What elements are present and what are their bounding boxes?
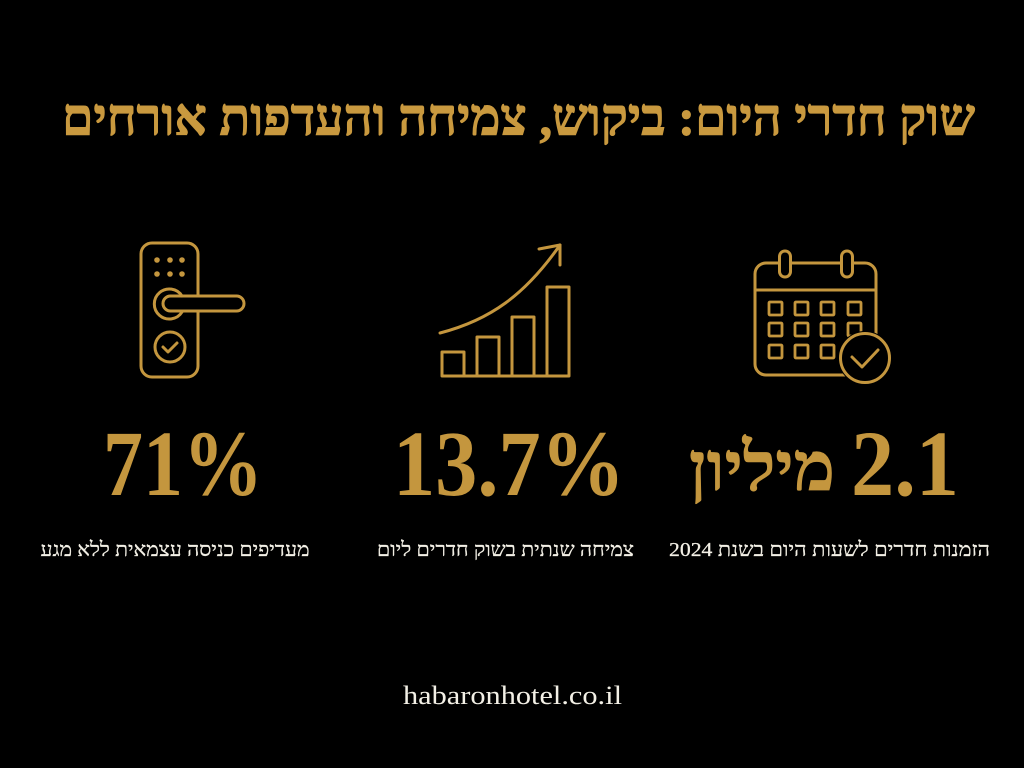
caption: annual growth: צמיחה שנתית בשוק חדרים ליום xyxy=(377,539,634,561)
caption: touchless entry: מעדיפים כניסה עצמאית ללא מגע xyxy=(40,539,310,561)
number: 13.7%: 13.7% xyxy=(393,413,625,516)
caption: bookings: הזמנות חדרים לשעות היום בשנת 2024 xyxy=(669,539,990,561)
panel: annual growth xyxy=(377,245,634,561)
footer: website: habaronhotel.co.il xyxy=(403,681,622,710)
icon: rising bar chart xyxy=(440,245,569,376)
number: 2.1 million xyxy=(689,413,959,516)
panel: touchless entry xyxy=(40,243,310,561)
icon: smart door lock xyxy=(141,243,244,377)
number: 2.1 million: מיליון xyxy=(689,429,835,505)
number: 2.1 million: 2.1 xyxy=(851,413,959,516)
icon: calendar with check xyxy=(755,251,892,385)
number: 71%: 71% xyxy=(103,413,263,516)
title: שוק חדרי היום: ביקוש, צמיחה והעדפות אורחים xyxy=(62,90,975,147)
panel: bookings xyxy=(669,251,990,561)
